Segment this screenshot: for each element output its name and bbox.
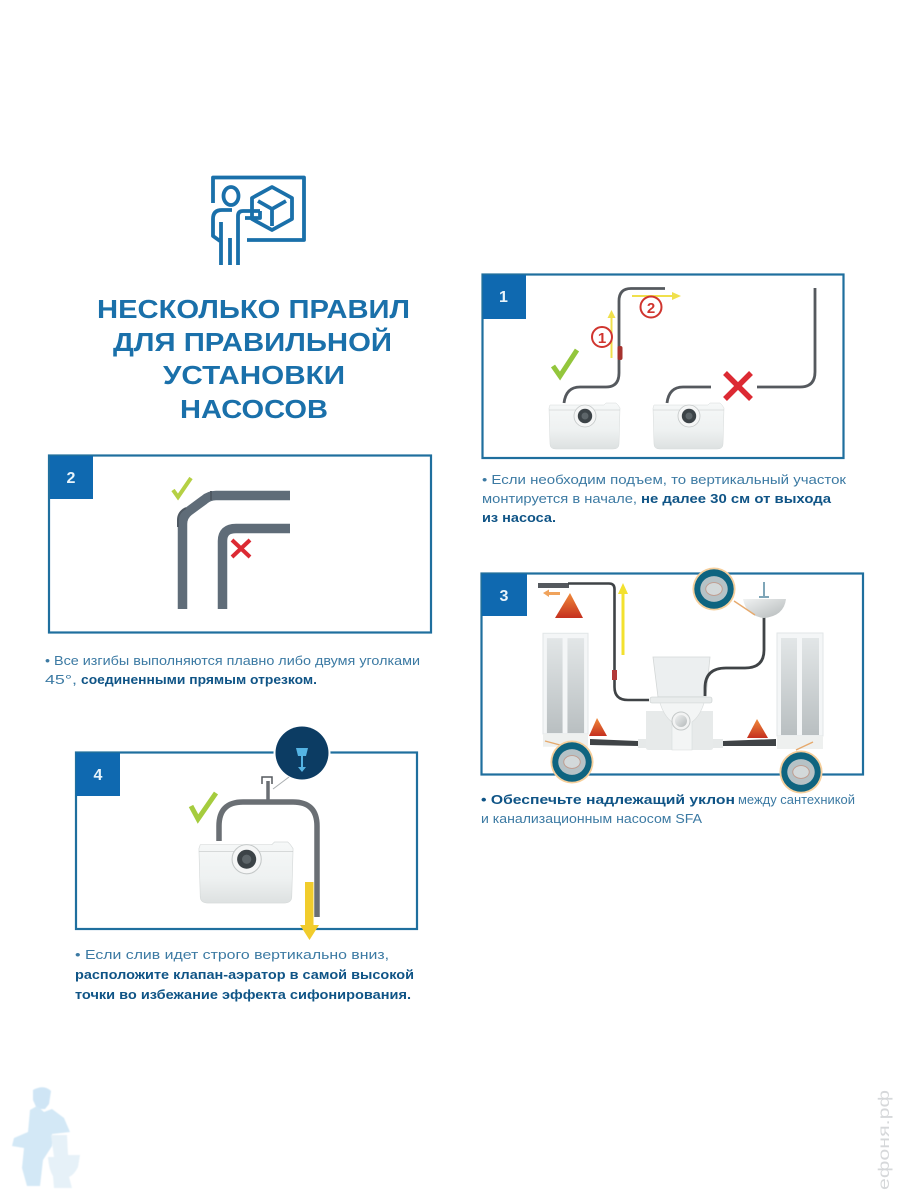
discharge pipe (538, 583, 649, 700)
shower left (543, 633, 588, 747)
pump left (549, 403, 620, 449)
text: panel 3 note (481, 793, 855, 826)
shower right (777, 633, 823, 749)
text: panel 3 note: между сантехникой (738, 793, 855, 807)
badge 3 (482, 574, 527, 616)
badge 4: 4 (94, 767, 103, 784)
text: panel 3 note: • Обеспечьте надлежащий уклон (481, 793, 735, 807)
title: УСТАНОВКИ (163, 360, 345, 390)
title: ДЛЯ ПРАВИЛЬНОЙ (113, 327, 392, 357)
pump right (653, 403, 724, 449)
aerator detail circle (274, 724, 330, 782)
step number 1 (592, 327, 612, 347)
title: НАСОСОВ (180, 394, 328, 424)
text: panel 1 note: не далее 30 см от выхода (641, 492, 832, 506)
wrong pipe route, left (667, 387, 711, 403)
icon: presenter with cube (213, 178, 304, 265)
seal bottom right (779, 742, 823, 794)
sink pipe (705, 617, 764, 696)
badge 2: 2 (67, 470, 76, 487)
badge 1: 1 (499, 289, 508, 306)
panel 2: smooth bends (49, 456, 431, 632)
plumber watermark (12, 1087, 80, 1188)
panel 3: slope between fixtures and pump (482, 567, 863, 794)
step number 2: 2 (647, 300, 655, 317)
red cross (232, 540, 250, 557)
site watermark: ефоня.рф (876, 1090, 893, 1190)
wrong sharp bend (222, 528, 290, 609)
text: panel 1 note (482, 473, 847, 525)
badge 1 (483, 275, 526, 319)
text: panel 2 note: соединенными прямым отрезком. (81, 673, 317, 687)
toilet and pump (646, 657, 713, 750)
arrow 1 (608, 310, 616, 358)
text: panel 2 note: 45°, (45, 673, 77, 687)
step number 1: 1 (598, 330, 606, 347)
yellow arrow down (300, 882, 319, 940)
text: panel 1 note: монтируется в начале, (482, 492, 637, 506)
pipe loop (219, 802, 317, 917)
warning triangle right (747, 719, 768, 738)
text: panel 4 note (75, 948, 414, 1002)
seal top (692, 567, 755, 615)
correct bend with two 45 degree elbows (178, 491, 290, 609)
text: panel 4 note: • Если слив идет строго вертикально вниз, (75, 948, 389, 962)
correct pipe route (564, 288, 665, 403)
seal bottom left (545, 740, 594, 784)
pump (199, 842, 293, 903)
warning triangle left (589, 718, 607, 736)
text: panel 1 note: из насоса. (482, 511, 556, 525)
connector line (273, 777, 289, 789)
sink with faucet (743, 582, 786, 618)
warning triangle top (555, 593, 583, 618)
badge 3: 3 (500, 588, 509, 605)
panel 4: vertical drop with aerator (76, 724, 417, 940)
text: panel 2 note: • Все изгибы выполняются плавно либо двумя уголками (45, 654, 420, 668)
coupling (618, 346, 622, 360)
red cross (725, 373, 751, 399)
title: НЕСКОЛЬКО ПРАВИЛ (97, 294, 410, 324)
check mark (173, 478, 191, 497)
badge 4 (76, 753, 120, 796)
aerator valve (262, 777, 272, 802)
text: panel 2 note (45, 654, 420, 687)
text: panel 4 note: расположите клапан-аэратор в самой высокой (75, 968, 414, 982)
text: panel 1 note: • Если необходим подъем, то вертикальный участок (482, 473, 847, 487)
arrow 2 (632, 292, 681, 300)
check mark (553, 350, 577, 376)
orange arrow left (543, 590, 560, 597)
check mark (191, 793, 216, 819)
right drain pipe (713, 739, 776, 748)
left drain pipe (590, 739, 646, 748)
wrong pipe route, right (757, 288, 815, 387)
text: panel 4 note: точки во избежание эффекта сифонирования. (75, 988, 411, 1002)
yellow arrow up (618, 583, 628, 655)
title (97, 294, 410, 424)
panel 1: vertical rise near pump (482, 274, 844, 458)
badge 2 (50, 456, 93, 499)
step number 2 (640, 296, 662, 318)
text: panel 3 note: и канализационным насосом SFA (481, 812, 703, 826)
